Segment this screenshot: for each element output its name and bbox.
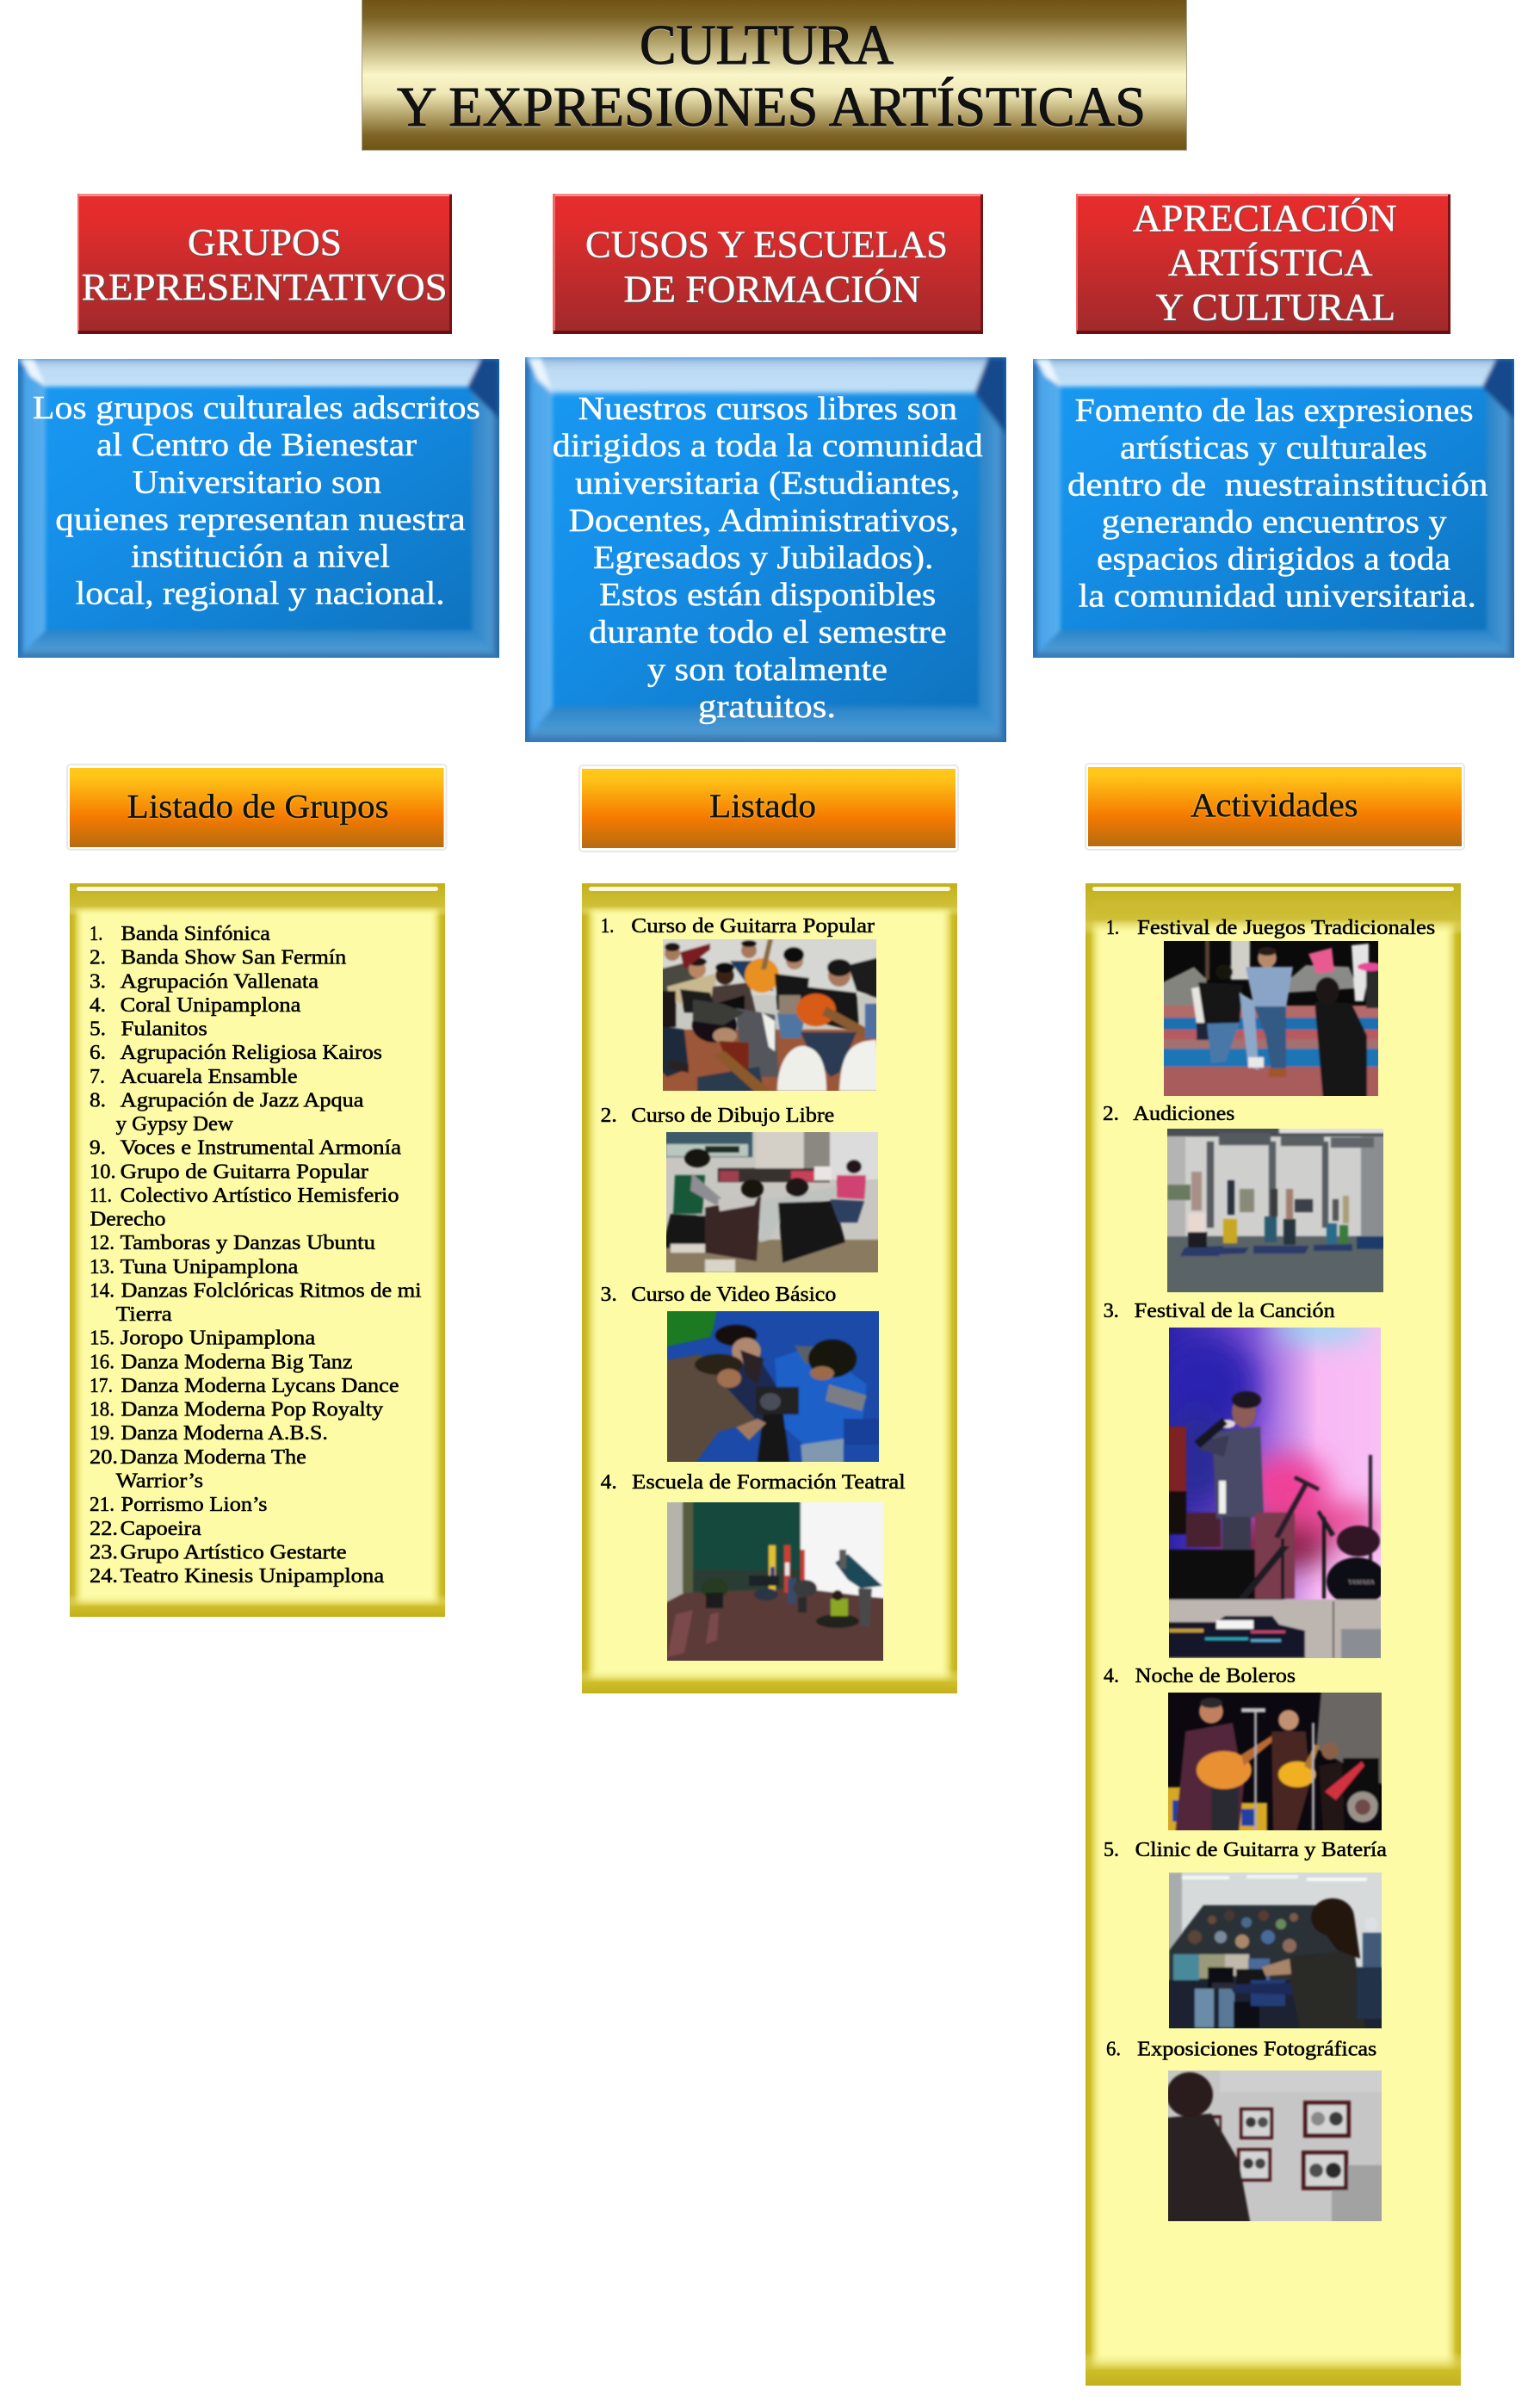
item: curso de video: Curso de Video Básico: [631, 1284, 836, 1306]
item: noche de boleros: 4.: [1104, 1665, 1119, 1687]
numbered list of groups: Tierra: [116, 1303, 172, 1326]
numbered list of groups: 15.: [90, 1328, 114, 1350]
numbered list of groups: Fulanitos: [121, 1018, 207, 1040]
numbered list of groups: 2.: [90, 947, 106, 969]
numbered list of groups: Grupo de Guitarra Popular: [121, 1161, 368, 1183]
heading: grupos representativos: REPRESENTATIVOS: [82, 266, 448, 308]
numbered list of groups: Capoeira: [121, 1518, 201, 1540]
numbered list of groups: 5.: [90, 1018, 106, 1040]
numbered list of groups: y Gypsy Dew: [116, 1113, 234, 1136]
panel: grupos description: institución a nivel: [131, 539, 390, 575]
item: festival de la canción: 3.: [1104, 1300, 1119, 1322]
numbered list of groups: Teatro Kinesis Unipamplona: [121, 1565, 385, 1588]
panel: cursos description: durante todo el semestre: [589, 615, 947, 651]
panel: apreciación description: dentro de nuestrainstitución: [1067, 467, 1488, 503]
panel: cursos description: [525, 357, 1006, 742]
numbered list of groups: Danzas Folclóricas Ritmos de mi: [121, 1279, 422, 1302]
heading: grupos representativos: GRUPOS: [188, 221, 342, 263]
numbered list of groups: 8.: [90, 1089, 106, 1111]
header: listado: [579, 765, 958, 851]
numbered list of groups: Danza Moderna Pop Royalty: [121, 1399, 383, 1421]
heading: cursos y escuelas: DE FORMACIÓN: [623, 269, 920, 310]
panel: grupos description: Universitario son: [133, 465, 381, 501]
header: actividades: Actividades: [1191, 787, 1358, 824]
panel: grupos description: quienes representan nuestra: [55, 501, 466, 537]
header: actividades: [1086, 764, 1464, 850]
numbered list of groups: 6.: [90, 1042, 106, 1064]
panel: cursos description: Egresados y Jubilados).: [593, 540, 933, 576]
photo: drawing class: [666, 1132, 878, 1272]
numbered list of groups: 20.: [90, 1446, 118, 1469]
item: exposiciones fotográficas: 6.: [1106, 2038, 1121, 2060]
numbered list of groups: Agrupación Vallenata: [121, 970, 319, 993]
numbered list of groups: 4.: [90, 994, 106, 1017]
item: clinic de guitarra: Clinic de Guitarra y Batería: [1135, 1839, 1387, 1861]
numbered list of groups: 21.: [90, 1494, 114, 1516]
photo: theatre school: [667, 1502, 883, 1661]
numbered list of groups: 9.: [90, 1137, 106, 1160]
numbered list of groups: 10.: [90, 1161, 116, 1183]
panel: lista de cursos: [582, 883, 957, 1693]
heading: grupos representativos: [77, 194, 452, 334]
numbered list of groups: 11.: [90, 1185, 112, 1207]
photo: boleros night: [1168, 1693, 1382, 1830]
numbered list of groups: 24.: [90, 1565, 118, 1588]
heading: apreciación artística: ARTÍSTICA: [1168, 241, 1373, 283]
panel: cursos description: dirigidos a toda la comunidad: [553, 428, 983, 464]
photo: traditional games: [1164, 941, 1378, 1096]
numbered list of groups: Danza Moderna Lycans Dance: [121, 1375, 399, 1397]
numbered list of groups: Warrior’s: [116, 1470, 203, 1493]
panel: cursos description: universitaria (Estudiantes,: [575, 465, 960, 501]
numbered list of groups: Joropo Unipamplona: [121, 1328, 316, 1350]
title text: CULTURA: [640, 14, 894, 77]
panel: apreciación description: espacios dirigidos a toda: [1097, 541, 1450, 577]
item: audiciones: 2.: [1103, 1103, 1119, 1125]
numbered list of groups: Banda Sinfónica: [121, 923, 270, 945]
item: festival de juegos: 1.: [1106, 917, 1119, 939]
numbered list of groups: 7.: [90, 1066, 105, 1088]
panel: apreciación description: la comunidad universitaria.: [1079, 579, 1476, 615]
photo: photo exhibition: [1168, 2071, 1382, 2221]
numbered list of groups: [90, 923, 422, 1588]
title text: [397, 14, 1146, 139]
numbered list of groups: 16.: [90, 1351, 114, 1373]
heading: apreciación artística: Y CULTURAL: [1156, 286, 1395, 328]
photo: song festival singer: [1169, 1328, 1381, 1658]
title banner: [362, 0, 1186, 150]
panel: grupos description: local, regional y nacional.: [76, 575, 445, 611]
numbered list of groups: 19.: [90, 1422, 114, 1445]
item: curso de guitarra: 1.: [601, 915, 614, 938]
numbered list of groups: Agrupación de Jazz Apqua: [121, 1089, 364, 1111]
numbered list of groups: Danza Moderna Big Tanz: [121, 1351, 353, 1373]
numbered list of groups: Banda Show San Fermín: [121, 947, 346, 969]
numbered list of groups: 14.: [90, 1279, 114, 1302]
item: curso de dibujo: 2.: [601, 1105, 617, 1127]
numbered list of groups: 17.: [90, 1375, 113, 1397]
panel: cursos description: Nuestros cursos libres son: [578, 391, 957, 427]
numbered list of groups: Tuna Unipamplona: [121, 1256, 299, 1278]
numbered list of groups: Agrupación Religiosa Kairos: [121, 1042, 382, 1064]
numbered list of groups: 18.: [90, 1399, 114, 1421]
numbered list of groups: 12.: [90, 1232, 114, 1254]
numbered list of groups: 13.: [90, 1256, 114, 1278]
numbered list of groups: 23.: [90, 1541, 118, 1563]
item: audiciones: Audiciones: [1133, 1103, 1234, 1125]
panel: cursos description: gratuitos.: [698, 689, 836, 725]
panel: cursos description: Estos están disponibles: [599, 577, 936, 613]
numbered list of groups: Danza Moderna A.B.S.: [121, 1422, 328, 1445]
numbered list of groups: Porrismo Lion’s: [121, 1494, 267, 1516]
header: listado de grupos: [67, 764, 446, 850]
item: noche de boleros: Noche de Boleros: [1135, 1665, 1296, 1687]
header: listado: Listado: [709, 788, 816, 825]
numbered list of groups: Coral Unipamplona: [121, 994, 301, 1017]
panel: apreciación description: artísticas y culturales: [1120, 430, 1427, 467]
item: curso de guitarra: Curso de Guitarra Popular: [631, 915, 875, 938]
item: escuela teatral: 4.: [601, 1471, 617, 1494]
heading: apreciación artística: APRECIACIÓN: [1133, 197, 1397, 239]
item: festival de juegos: Festival de Juegos Tradicionales: [1137, 917, 1435, 939]
numbered list of groups: Acuarela Ensamble: [121, 1066, 298, 1088]
photo: guitar clinic: [1169, 1873, 1382, 2028]
panel: lista de grupos: [70, 883, 445, 1617]
numbered list of groups: Voces e Instrumental Armonía: [121, 1137, 401, 1160]
title text: Y EXPRESIONES ARTÍSTICAS: [397, 76, 1146, 139]
photo: guitar class: [663, 939, 876, 1091]
photo: video class: [667, 1311, 879, 1462]
panel: actividades: [1086, 883, 1461, 2386]
panel: apreciación description: generando encuentros y: [1102, 505, 1447, 541]
panel: grupos description: Los grupos culturales adscritos: [33, 390, 480, 426]
panel: apreciación description: Fomento de las expresiones: [1075, 393, 1474, 429]
photo: auditions: [1167, 1129, 1383, 1292]
heading: cursos y escuelas: [553, 194, 983, 334]
numbered list of groups: Tamboras y Danzas Ubuntu: [121, 1232, 375, 1254]
photo: song festival singer: YAMAHA: [1348, 1579, 1375, 1586]
numbered list of groups: Derecho: [90, 1209, 165, 1231]
numbered list of groups: Danza Moderna The: [121, 1446, 306, 1469]
item: escuela teatral: Escuela de Formación Teatral: [632, 1471, 906, 1494]
heading: cursos y escuelas: CUSOS Y ESCUELAS: [585, 224, 948, 265]
item: exposiciones fotográficas: Exposiciones Fotográficas: [1137, 2038, 1376, 2060]
numbered list of groups: 22.: [90, 1518, 118, 1540]
heading: apreciación artística: [1076, 194, 1450, 334]
panel: apreciación description: [1033, 359, 1514, 658]
numbered list of groups: Grupo Artístico Gestarte: [121, 1541, 347, 1563]
panel: grupos description: al Centro de Bienestar: [96, 427, 417, 463]
numbered list of groups: Colectivo Artístico Hemisferio: [121, 1185, 399, 1207]
panel: cursos description: Docentes, Administrativos,: [569, 503, 959, 539]
panel: grupos description: [18, 359, 499, 658]
panel: cursos description: y son totalmente: [647, 652, 888, 688]
item: festival de la canción: Festival de la Canción: [1135, 1300, 1335, 1322]
header: listado de grupos: Listado de Grupos: [127, 789, 389, 825]
numbered list of groups: 3.: [90, 970, 106, 993]
numbered list of groups: 1.: [90, 923, 102, 945]
item: curso de dibujo: Curso de Dibujo Libre: [631, 1105, 834, 1127]
item: curso de video: 3.: [601, 1284, 617, 1306]
item: clinic de guitarra: 5.: [1104, 1839, 1119, 1861]
